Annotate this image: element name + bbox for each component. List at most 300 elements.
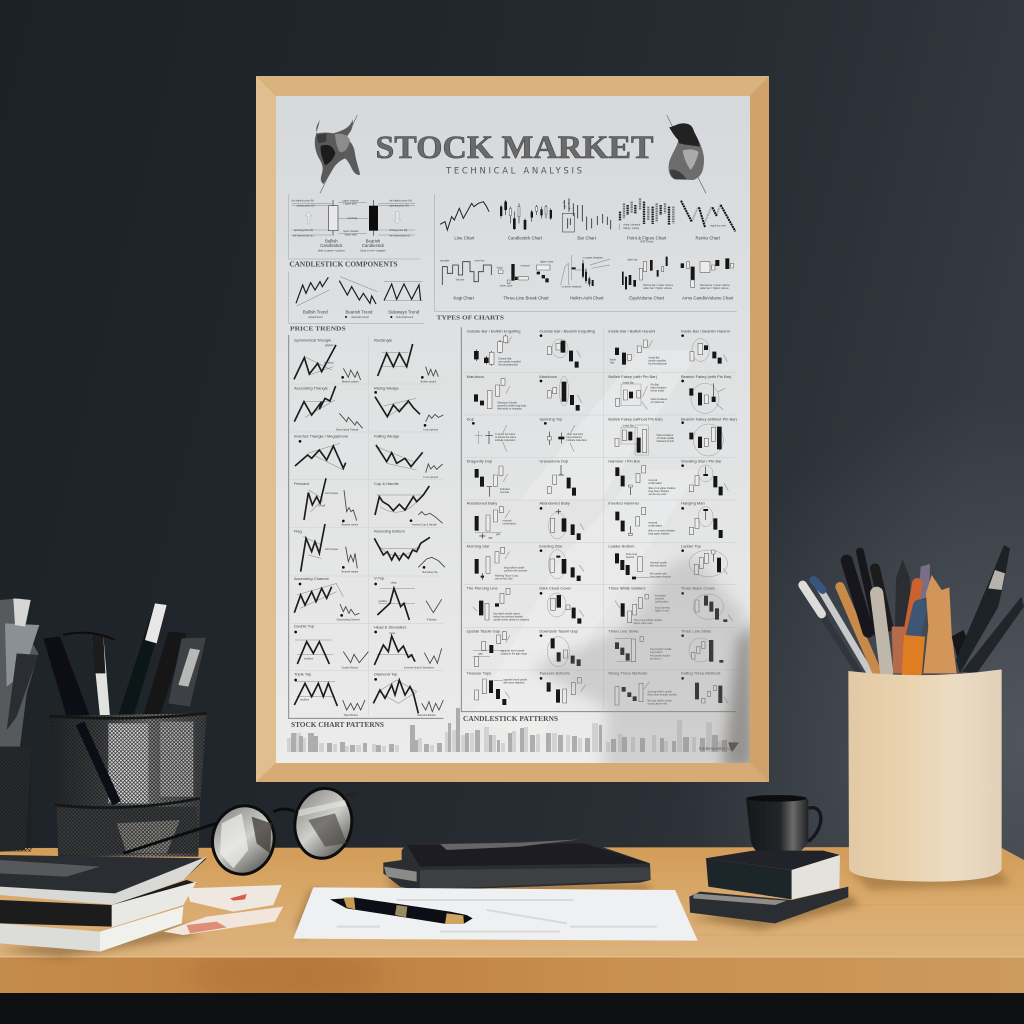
candle: rising three methods: Rising Three Methods — [608, 671, 647, 676]
candle: ladder top — [681, 543, 728, 577]
candle: hammer pin bar: can be any color — [648, 493, 667, 496]
pattern: head and shoulders — [374, 624, 442, 669]
pattern: rising wedge: Rising Wedge — [374, 385, 400, 390]
pattern: ascending triangle: Descending Triangle — [336, 428, 359, 431]
candle: inverted hammer — [608, 501, 675, 535]
wire mesh basket — [50, 713, 207, 857]
candle: tweezer bottoms — [539, 671, 586, 703]
pattern: symmetrical triangle — [294, 338, 361, 383]
pattern: flag — [294, 524, 359, 574]
candle diagram: opening price (O) — [389, 204, 409, 207]
pattern: triple top — [294, 672, 365, 717]
candle diagram: Candlestick — [320, 243, 343, 248]
candle: inside bar bullish harami: Inside Bar / Bullish Harami — [608, 328, 655, 333]
candle: bearish fakey with pin bar — [681, 374, 732, 413]
candle: three white soldiers: Increased — [655, 595, 667, 598]
candle: spinning top: short real body — [567, 433, 584, 436]
candle: three white soldiers: confirmation — [655, 601, 669, 604]
pens in cup — [803, 545, 1024, 675]
candle diagram: opening price (O) — [294, 229, 313, 232]
pattern: double top: Double Top — [294, 623, 315, 628]
candle: outside bar bullish engulfing: the preceding bar — [498, 363, 518, 366]
candle: spinning top: Spinning Top — [539, 416, 563, 421]
pattern: falling wedge: Falling Wedge — [374, 433, 400, 438]
chart: sideways trend: Sideways Trend — [388, 310, 420, 315]
chart: bullish trend: upward trend — [308, 316, 323, 319]
chart: heikin-ashi chart: no lower shadows — [562, 286, 582, 289]
pattern: pennant: Bearish variant — [342, 524, 359, 527]
candle: gravestone doji — [539, 458, 576, 496]
pattern: pennant — [294, 478, 359, 527]
candle: morning star: Morning Top or Long — [495, 575, 518, 578]
pattern: rectangle — [374, 338, 438, 383]
pattern: ascending channel — [294, 576, 360, 621]
chart: candlestick chart — [500, 200, 552, 241]
candle: rising three methods: closing above first — [647, 703, 668, 706]
candle: bullish fakey without pin bar: Bullish Fakey (without Pin Bar) — [608, 416, 663, 421]
candle: ladder bottom: with low above — [650, 564, 667, 567]
candle: inverted hammer: Inverted Hammer — [608, 501, 640, 506]
poster sheet — [276, 96, 750, 763]
panel: candlestick patterns, lower rows — [461, 535, 736, 712]
candle: ladder bottom: 4th candle with — [650, 572, 667, 575]
chart: point and figure chart: Point & Figure Chart — [627, 236, 667, 241]
chart: equivolume chart — [622, 257, 674, 301]
pattern: ascending triangle: Ascending Triangle — [294, 385, 329, 390]
fountain pen — [330, 897, 473, 924]
candle: bullish fakey with pin bar: False breakout — [651, 398, 667, 401]
pattern: symmetrical triangle: Symmetrical Triangle — [294, 338, 332, 343]
candle: tweezer tops: with same high/low — [503, 682, 525, 685]
candle: ladder bottom: long upper shadow — [650, 575, 671, 578]
pattern: triple top: Triple Top — [294, 672, 312, 677]
candle: upside tasuki gap — [467, 628, 528, 667]
candle diagram: the lowest price (L) — [389, 234, 410, 237]
chart: sideways trend: horizontal trend — [396, 316, 414, 319]
candle: dark cloud cover: Dark Cloud Cover — [539, 586, 572, 591]
candle: inside bar bullish harami: Inside — [609, 359, 617, 362]
candle: bullish fakey with pin bar: Inside Bar — [623, 381, 634, 384]
chart: point and figure chart: rising / demand — [623, 224, 641, 227]
eyeglasses — [123, 785, 358, 880]
pattern: head and shoulders: head — [389, 632, 395, 635]
candle: three white soldiers: highs of next — [655, 609, 669, 612]
chart: bullish trend — [296, 277, 329, 319]
pattern: diamond top — [373, 672, 443, 717]
candle diagram: black or red = negative — [360, 249, 386, 252]
chart: heikin-ashi chart — [561, 255, 610, 301]
candle: dragonfly doji — [467, 458, 511, 497]
candle: piercing line: big bullish candle opens — [493, 612, 521, 615]
pattern: v-top: V-Bottom — [427, 618, 437, 621]
pens in basket — [43, 603, 206, 717]
candle: dragonfly doji: Dragonfly Doji — [467, 458, 492, 463]
candle: inside bar bullish harami: by preceding bar — [648, 362, 667, 365]
chart: kagi chart: Kagi Chart — [453, 296, 475, 301]
window light shadow on poster — [530, 555, 760, 770]
chart: bullish trend: Bullish Trend — [303, 310, 328, 315]
candle diagram: lower shadow — [343, 230, 359, 233]
pattern: pennant: Pennant — [294, 481, 310, 486]
candle: abandoned baby bearish: Abandoned Baby — [539, 501, 570, 506]
chart: three line break chart: Gaps — [497, 266, 503, 269]
candle: evening star — [539, 543, 584, 581]
candle: abandoned baby bullish: Abandoned Baby — [467, 501, 497, 506]
candle: inside bar bearish harami — [681, 328, 730, 364]
candle: hammer pin bar — [608, 458, 676, 496]
candle: abandoned baby bullish — [467, 501, 517, 539]
panel: candlestick components — [289, 194, 420, 259]
icon: bear — [667, 115, 706, 193]
pattern: ascending channel: Ascending Channel — [294, 576, 329, 581]
book stack — [689, 851, 848, 923]
wooden desk — [0, 847, 1024, 1024]
pattern: flag: Bearish variant — [342, 571, 359, 574]
candle: ladder bottom: bearish — [626, 556, 635, 559]
candle: dragonfly doji: reversal — [500, 491, 509, 494]
pattern: pennant: short pause — [325, 492, 339, 495]
candle: falling three methods — [681, 671, 728, 703]
candle: upside tasuki gap: Upside Tasuki Gap — [467, 628, 501, 633]
pattern: symmetrical triangle: breakout — [324, 362, 334, 365]
candle: outside bar bullish engulfing: Outside Bar: — [498, 357, 512, 360]
top section in crop coordinates — [289, 115, 737, 333]
desk items center — [293, 839, 698, 941]
candle: outside bar bullish engulfing: one candle engulfed — [498, 360, 521, 363]
chart: kagi chart: neck line — [475, 259, 485, 262]
chart: equivolume chart: Narrow bar = lower volume — [643, 284, 674, 287]
candle: three white soldiers: Three long bullish candles — [633, 619, 663, 622]
panel: candlestick patterns, upper rows — [461, 327, 738, 540]
candle: morning star: long bullish candle — [504, 566, 525, 569]
chart: renko chart: equal box size — [710, 224, 726, 227]
panel: stock chart patterns — [289, 335, 445, 718]
candle: bullish fakey without pin bar: False breakout — [657, 434, 673, 437]
candle diagram: closing price (C) — [297, 204, 315, 207]
heading: types of charts: TYPES OF CHARTS — [437, 314, 504, 321]
wooden poster frame — [256, 76, 769, 782]
stacked books, left — [0, 855, 207, 952]
pattern: v-top: V-Top — [374, 575, 385, 580]
candle: hammer pin bar: confirmation — [648, 482, 662, 485]
chart: arms candlevolume chart: Arms CandleVolume Chart — [682, 296, 734, 301]
pattern: v-top — [374, 575, 442, 621]
cup group, right — [689, 545, 1024, 923]
candle: three white soldiers: higher close each — [633, 622, 653, 625]
candle: spinning top: indicate indecision — [567, 439, 588, 442]
candle: spinning top: long shadows — [567, 436, 583, 439]
candle: three line strike bullish: 4th candle engulfs — [650, 655, 671, 658]
candle: outside bar bearish engulfing — [539, 328, 595, 368]
chart: heikin-ashi chart: no upper shadows — [583, 256, 604, 259]
candle: three white soldiers: Three White Soldiers — [608, 586, 646, 591]
wooden pen cup — [848, 669, 1002, 882]
candle: ladder bottom: three long — [626, 553, 638, 556]
candle: rising three methods: 1st long bullish candle — [647, 690, 672, 693]
candle: piercing line — [467, 586, 529, 621]
chart: equivolume chart: wider bar — [627, 259, 638, 262]
chart: bar chart: Bar Chart — [577, 236, 597, 241]
candle: marubozu bullish — [467, 374, 527, 410]
pattern: v-top: sharp — [391, 581, 397, 584]
candle: bullish fakey with pin bar: Pin Bar — [651, 384, 659, 387]
candle: gravestone doji: Gravestone Doji — [539, 458, 568, 463]
chart: equivolume chart: EquiVolume Chart — [629, 296, 665, 301]
candle: tweezer tops — [467, 671, 528, 705]
candle: piercing line: candle closes above its midpoint — [493, 618, 529, 621]
pattern: falling wedge: In an uptrend — [423, 476, 439, 479]
candle: inside bar bullish harami: Bar — [610, 362, 614, 365]
candle: three black crows: Three Black Crows — [681, 586, 715, 591]
chart: point and figure chart — [619, 198, 673, 244]
candle: bullish fakey without pin bar — [608, 416, 675, 455]
pattern: cup and handle: Inverted Cup & Handle — [412, 524, 437, 527]
chart: equivolume chart: wider bar = higher volume — [643, 287, 673, 290]
candle: falling three methods: Falling Three Methods — [681, 671, 721, 676]
candle: doji: or almost the same — [495, 436, 517, 439]
left wire basket and pens — [0, 598, 207, 857]
pattern: rounding bottom — [374, 528, 445, 574]
candle: three line strike bullish: previous 3 — [650, 658, 662, 661]
candle: abandoned baby bearish — [539, 501, 584, 540]
candle: shooting star pin bar — [681, 458, 728, 495]
pattern: v-top: neckline — [378, 600, 388, 603]
pattern: rising wedge: In an uptrend — [423, 428, 439, 431]
poster content — [287, 115, 738, 752]
chart: three line break chart: higher close — [540, 261, 554, 264]
chart: three line break chart: Three-Line Break Chart — [503, 296, 549, 301]
candle diagram: the highest price (H) — [389, 199, 412, 202]
candle: upside tasuki gap: opposite trend candle — [501, 650, 525, 653]
candle: downside tasuki gap: Downside Tasuki Gap — [539, 628, 579, 633]
candle diagram: white or green = positive — [318, 249, 345, 252]
candle: inverted hammer: long upper shadow — [648, 532, 670, 535]
candle: bullish fakey with pin bar — [608, 374, 667, 409]
candle: outside bar bullish engulfing: Outside Bar / Bullish Engulfing — [467, 328, 520, 333]
pattern: diamond top: Diamond Top — [374, 672, 398, 677]
candle: marubozu bullish: little wicks or shadows — [497, 407, 523, 410]
heading: stock chart patterns: STOCK CHART PATTERNS — [291, 720, 384, 729]
candle: hammer pin bar: long lower shadow — [648, 490, 669, 493]
title: Stock Market: STOCK MARKET — [376, 130, 654, 166]
scattered notes — [163, 885, 283, 935]
candle: ladder top: Ladder Top — [681, 543, 702, 548]
candle: three white soldiers — [608, 586, 670, 625]
candle: dark cloud cover — [539, 586, 584, 624]
candle: ladder bottom: Ladder Bottom — [608, 543, 635, 548]
candle: inverted hammer: confirmation — [648, 524, 662, 527]
candle: upside tasuki gap: gap — [478, 652, 483, 655]
pattern: inverted triangle — [294, 433, 349, 470]
candle: morning star: confirms the reversal — [504, 569, 528, 572]
chart: kagi chart — [440, 259, 491, 301]
candle diagram: upper shadow — [343, 199, 358, 202]
candle: bearish fakey with pin bar: Bearish Fakey (with Pin Bar) — [681, 374, 732, 379]
candle: marubozu bearish — [539, 374, 582, 411]
pattern: triple top: Triple Bottom — [343, 714, 358, 717]
candle: evening star: Evening Star — [539, 543, 563, 548]
candle: outside bar bullish engulfing — [467, 328, 521, 366]
candle: ladder bottom: reversal candle — [650, 561, 667, 564]
candle: tweezer tops: Tweezer Tops — [467, 671, 491, 676]
heading: price trends: PRICE TRENDS — [290, 326, 346, 333]
far-left basket with pens — [0, 598, 39, 852]
candle: marubozu bullish: Marubozu — [467, 374, 484, 379]
skyline bar graphic — [287, 708, 727, 752]
candle: bullish fakey without pin bar: of inside candle — [657, 437, 675, 440]
chart: three line break chart: reversal — [521, 265, 530, 268]
chart: renko chart — [681, 201, 735, 241]
chart: kagi chart: shoulder — [440, 259, 450, 262]
candle diagram: real body — [347, 217, 358, 220]
chart: arms candlevolume chart: wider bar = higher volume — [700, 287, 729, 290]
candle: abandoned baby bullish: confirmation — [503, 523, 517, 526]
pattern: head and shoulders: Head & Shoulders — [374, 624, 406, 629]
candle diagram: the lowest price (L) — [293, 234, 314, 237]
pattern: rounding bottom: Rounding Top — [422, 571, 438, 574]
pattern: diamond top: Diamond Bottom — [417, 714, 436, 717]
candle: hammer pin bar: reversal — [648, 479, 658, 482]
candle: three line strike bearish: Three Line Strike — [681, 628, 712, 633]
desk contact shadows — [0, 870, 1010, 958]
candle: bullish fakey with pin bar: of inside bar — [651, 401, 664, 404]
candle: three line strike bearish — [681, 628, 723, 663]
candle: piercing line: The Piercing Line — [467, 586, 498, 591]
chart: renko chart: Renko Chart — [696, 236, 721, 241]
candle: inverted hammer: little or no lower shadow — [648, 529, 675, 532]
pattern: rectangle: Rectangle — [374, 338, 393, 343]
candle: three black crows — [681, 586, 733, 622]
panel: price trends — [289, 272, 424, 323]
candle: morning star — [467, 543, 528, 581]
candle: hammer pin bar: little or no upper shadow — [648, 487, 676, 490]
pattern: cup and handle: Cup & Handle — [374, 481, 400, 486]
candle: dragonfly doji: Indicates — [500, 488, 511, 491]
chart: point and figure chart: (P&F Chart) — [640, 241, 653, 244]
candle diagram: closing price (C) — [389, 229, 407, 232]
candle diagram: Bullish — [325, 239, 338, 244]
chart: point and figure chart: falling / supply — [623, 227, 640, 230]
candle: inverted hammer: reversal — [648, 521, 658, 524]
subtitle: Technical Analysis: TECHNICAL ANALYSIS — [445, 166, 582, 176]
heading: candlestick patterns: CANDLESTICK PATTERNS — [463, 714, 558, 723]
chart: arms candlevolume chart: Narrow bar = lower volume — [700, 284, 730, 287]
candle: downside tasuki gap — [539, 628, 581, 667]
pattern: flag: Flag — [294, 528, 302, 533]
candle: three line strike bullish: Three Line Strike — [608, 628, 639, 633]
candle: marubozu bullish: powerful candle long body — [497, 404, 527, 407]
candle: outside bar bearish engulfing: Outside Bar / Bearish Engulfing — [539, 328, 595, 333]
candle: marubozu bullish: Marubozu Candle: — [497, 401, 518, 404]
candle: bullish fakey without pin bar: Inside Bar — [623, 425, 634, 428]
pattern: double top: neckline — [304, 657, 314, 660]
candle: bullish fakey without pin bar: followed by bull — [657, 440, 674, 443]
candle: inside bar bullish harami: candle engulfed — [648, 359, 666, 362]
pattern: rounding bottom: Rounding Bottom — [374, 528, 405, 533]
candle: hammer pin bar: Hammer / Pin Bar — [608, 458, 641, 463]
chart: arms candlevolume chart — [681, 258, 734, 301]
panel: types of charts — [435, 194, 737, 311]
pattern: rising wedge — [374, 385, 443, 431]
candle: doji — [467, 416, 517, 452]
chart: line chart — [440, 202, 489, 241]
candle: abandoned baby bullish: reversal — [503, 520, 512, 523]
candle: doji: Doji — [467, 416, 474, 421]
chart: bearish trend: Bearish Trend — [346, 310, 373, 315]
candle: abandoned baby bullish: gap — [496, 533, 501, 536]
pattern: ascending triangle — [294, 385, 363, 431]
candle: tweezer bottoms: Tweezer Bottoms — [539, 671, 570, 676]
pattern: symmetrical triangle: pT:A-F — [325, 345, 333, 348]
candle diagram: / upper wick — [343, 203, 357, 206]
candle diagram: Bearish — [366, 239, 381, 244]
candle: rising three methods: 5th long bullish candle — [647, 700, 673, 703]
pattern: cup and handle — [374, 481, 443, 527]
publisher logo — [699, 743, 738, 751]
pattern: double top — [294, 623, 368, 669]
candle: bearish fakey without pin bar — [681, 416, 738, 456]
candle diagram: Candlestick — [362, 243, 385, 248]
candle: three line strike bullish: long bearish candle — [650, 648, 672, 651]
pattern: rectangle: Bullish variant — [421, 380, 436, 383]
mug — [746, 795, 821, 858]
candle: bullish fakey with pin bar: false breakout — [651, 387, 667, 390]
chart: bearish trend — [339, 277, 377, 319]
candle: inside bar bullish harami — [608, 328, 667, 365]
chart: heikin-ashi chart: Heikin-Ashi Chart — [570, 296, 604, 301]
candle: rising three methods: three short bearish candles — [647, 693, 678, 696]
candle: bearish fakey without pin bar: Bearish Fakey (without Pin Bar) — [681, 416, 738, 421]
candle: hanging man: Hanging Man — [681, 501, 705, 506]
chart: bar chart — [562, 198, 611, 241]
pattern: double top: Double Bottom — [342, 666, 358, 669]
pattern: inverted triangle: Inverted Triangle / Megaphone — [294, 433, 349, 438]
candle: rising three methods — [608, 671, 678, 706]
candle diagram: the highest price (H) — [292, 199, 314, 202]
pattern: triple top: neckline — [300, 699, 310, 702]
paper sheet — [293, 887, 698, 941]
pattern: symmetrical triangle: Bearish variant — [342, 380, 359, 383]
candle diagram: / lower wick — [344, 233, 358, 236]
chart: three line break chart — [497, 261, 554, 301]
chart: three line break chart: lower close — [500, 285, 513, 288]
pattern: falling wedge — [374, 433, 443, 479]
candle: doji: indicate indecision — [495, 439, 516, 442]
candle: spinning top — [539, 416, 588, 452]
chart: sideways trend — [384, 282, 423, 319]
pattern: pennant: to half — [318, 505, 325, 508]
chart: line chart: Line Chart — [454, 236, 475, 241]
heading: candlestick components: CANDLESTICK COMPONENTS — [289, 261, 398, 269]
candle: upside tasuki gap: closing in the gap range — [501, 653, 528, 656]
candle: inside bar bearish harami: Inside Bar / Bearish Harami — [681, 328, 730, 333]
candle diagram — [292, 199, 415, 252]
candle: ladder bottom — [608, 543, 671, 579]
candle: morning star: Morning Star — [467, 543, 490, 548]
leather wallet — [383, 839, 651, 891]
candle: marubozu bearish: Marubozu — [539, 374, 557, 379]
candle: doji: C and O the same — [495, 433, 516, 436]
candle: morning star: can be Any Star — [495, 578, 513, 581]
pattern: flag: short pause — [325, 548, 339, 551]
candle: tweezer tops: opposite trend candle — [503, 679, 528, 682]
icon: bull — [315, 115, 360, 193]
chart: bearish trend: downward trend — [351, 316, 369, 319]
candle: shooting star pin bar: Shooting Star / Pin Bar — [681, 458, 722, 463]
candle: three line strike bullish — [608, 628, 672, 662]
candle: hanging man — [681, 501, 723, 538]
pattern: head and shoulders: Inverted Head & Shoulders — [404, 666, 435, 669]
